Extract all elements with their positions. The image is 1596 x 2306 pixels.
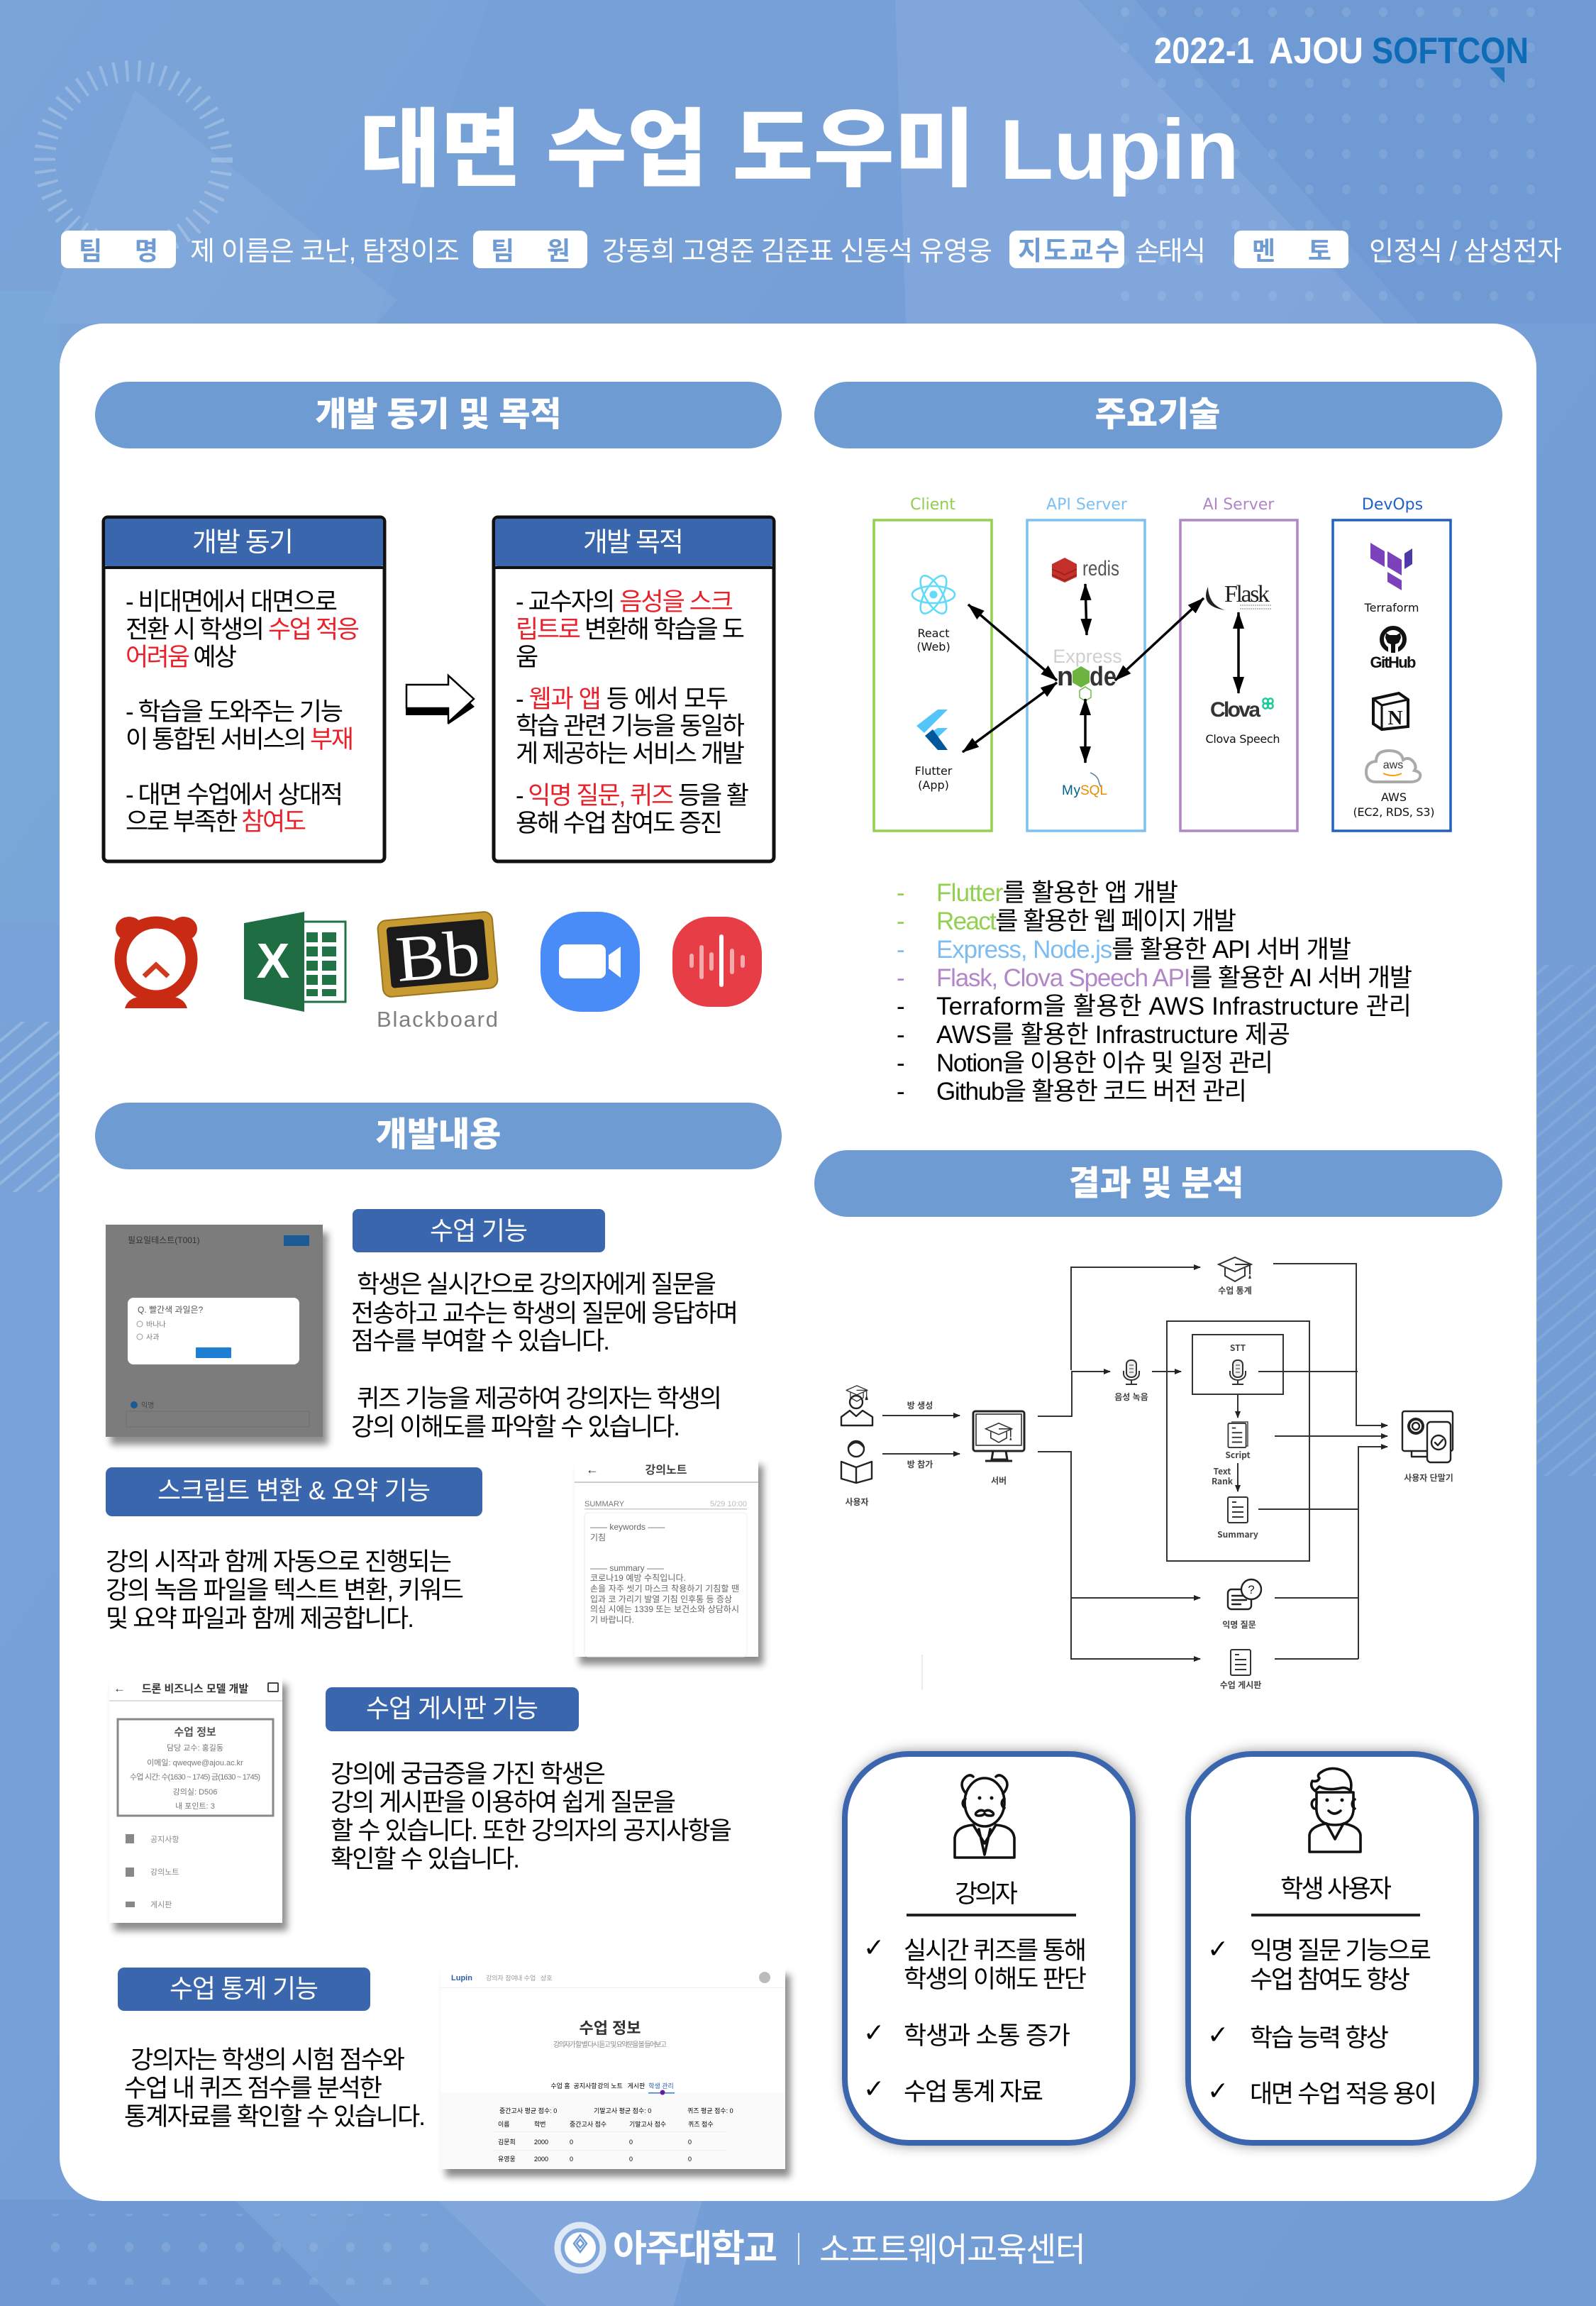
panel: 개발 동기: - 대면 수업에서 상대적 [126,781,343,809]
tech list: Express, Node.js를 활용한 API 서버 개발 [936,936,1351,964]
screenshot: class statistics: 김문희 [498,2138,516,2146]
icon: Flutter: (App) [918,778,949,792]
panel: 개발 동기: 어려움 예상 [126,644,237,671]
column: API Server [1027,496,1145,831]
pill: 수업 게시판 기능: 수업 게시판 기능 [366,1694,538,1723]
icon: Redis [1052,557,1119,583]
tech list: Notion을 이용한 이슈 및 일정 관리 [936,1049,1273,1077]
text: 게시판 기능 설명: 확인할 수 있습니다. [331,1846,520,1873]
flow labels: 사용자 [845,1496,869,1508]
professor: 손태식 [1135,237,1206,267]
pill: 수업 게시판 기능 [326,1687,579,1731]
icon: Terraform: Terraform [1364,601,1419,614]
flow labels: 방 참가 [907,1458,933,1470]
flow labels: STT [1230,1342,1246,1354]
screenshot: class board menu: 담당 교수: 홍길동 [167,1743,223,1753]
screenshot: class statistics: 퀴즈 점수 [688,2120,714,2128]
screenshot: class statistics: 퀴즈 평균 점수: 0 [687,2107,733,2114]
pill: 스크립트 변환 & 요약 기능: 스크립트 변환 & 요약 기능 [157,1476,431,1505]
tech list: Flask, Clova Speech API를 활용한 AI 서버 개발 [936,964,1412,992]
icon: Express and Node.js: n [1057,662,1073,692]
screenshot: class board menu: 강의실: D506 [173,1787,217,1797]
heading: 결과 및 분석: 결과 및 분석 [1068,1165,1244,1203]
icon: Notion [1373,693,1408,729]
panel: 개발 목적: 학습 관련 기능을 동일하 [516,712,745,740]
panel: 개발 목적: 용해 수업 참여도 증진 [516,810,723,837]
screenshot: class statistics: 0 [629,2156,633,2163]
icon: Blackboard [377,911,498,1032]
screenshot: class board menu [109,1677,282,1923]
panel: 개발 동기 [104,517,384,861]
logo: 2022-1 AJOU SOFTCON: SOFTCON [1372,31,1529,72]
footer: Ajou University Software Education Center: 소프트웨어교육센터 [819,2231,1086,2268]
icon: lecturer [955,1775,1014,1858]
screenshot: lecture note [575,1457,758,1657]
icon: Terraform [1364,543,1419,614]
icon: class statistics cap [1219,1257,1251,1281]
icon: MySQL [1062,773,1107,798]
icon: Express and Node.js [1053,646,1122,701]
icon: lecturer user [841,1386,872,1425]
arrows: connections [963,584,1238,763]
card: 학생 사용자 [1188,1754,1476,2143]
team info row [61,231,1562,268]
card: 학생 사용자: ✓ [1207,2021,1229,2050]
card: 강의자: 강의자 [955,1880,1018,1908]
icons: existing apps [116,911,762,1032]
screenshot: class statistics: 강의자 참여 [486,1974,517,1982]
flow labels: 방 생성 [907,1399,933,1411]
panel: 개발 목적: 게 제공하는 서비스 개발 [516,740,745,768]
card: 학생 사용자: 대면 수업 적응 용이 [1250,2080,1437,2108]
tech list: - [897,907,905,935]
panel: 개발 동기: 개발 동기 [192,528,294,558]
text: 통계 기능 설명 [124,2046,426,2131]
tech list: - [897,993,905,1020]
icon: voice recorder [672,917,762,1007]
screenshot: class board menu: ← [113,1682,126,1695]
screenshot: class statistics: 기말고사 평균 점수: 0 [594,2107,651,2114]
card: 강의자: ✓ [863,1933,885,1963]
flow lines [882,1264,1387,1659]
pill: 수업 통계 기능: 수업 통계 기능 [170,1974,318,2003]
tech list: - [897,964,905,992]
icon: Express and Node.js: Express [1053,646,1122,667]
screenshot: class statistics: 2000 [534,2156,548,2163]
mentor pill [1234,231,1348,268]
icon: university seal [558,2225,603,2271]
panel: 개발 목적: 개발 목적 [583,528,684,558]
tech list: - [897,1021,905,1049]
icon: Express and Node.js: de [1090,662,1116,692]
panel: 개발 동기: 으로 부족한 참여도 [126,808,306,836]
screenshot: lecture note: ← [586,1462,599,1477]
screenshot: class statistics: 2000 [534,2139,548,2146]
text: 게시판 기능 설명: 할 수 있습니다. 또한 강의자의 공지사항을 [331,1817,732,1845]
text: 수업 기능 설명: 퀴즈 기능을 제공하여 강의자는 학생의 [357,1385,722,1413]
icon: Notion: N [1388,707,1403,729]
screenshot: class statistics: 0 [688,2156,692,2163]
logo: 2022-1 AJOU SOFTCON [1154,31,1529,83]
tech list: React를 활용한 웹 페이지 개발 [936,907,1236,935]
screenshot: class statistics: 수업 홈 [550,2082,570,2090]
column: AI Server: AI Server [1203,496,1275,514]
heading: 개발 동기 및 목적: 개발 동기 및 목적 [315,396,562,434]
icon: GitHub: GitHub [1370,653,1416,671]
text: 통계 기능 설명: 강의자는 학생의 시험 점수와 [131,2046,405,2074]
card: 학생 사용자: 수업 참여도 향상 [1250,1966,1410,1994]
arrow: 동기 to 목적 [406,675,475,724]
screenshot: class board menu: 공지사항 [150,1835,179,1844]
icon: question: ? [1248,1583,1255,1596]
card: 강의자: 학생의 이해도 판단 [904,1965,1087,1993]
text: 게시판 기능 설명: 강의에 궁금증을 가진 학생은 [331,1760,606,1788]
screenshot: class statistics: 강의 노트 [597,2082,623,2090]
icon: Clova: Clova [1210,698,1260,722]
screenshot: class statistics: 수업 정보 [579,2019,641,2037]
text: 수업 기능 설명: 점수를 부여할 수 있습니다. [351,1328,610,1355]
screenshot: lecture note: —— summary —— [590,1563,664,1573]
flow labels: 익명 질문 [1222,1618,1256,1631]
tech architecture diagram [874,496,1451,831]
flow labels [845,1284,1453,1691]
screenshot: quiz screen: 익명 [141,1401,154,1410]
panel: 개발 목적: 립트로 변환해 학습을 도 [516,616,745,644]
screenshot: class statistics: 강의자가 할 별 다시 듣고 및 요약문을 볼 들어보고 [553,2041,667,2049]
panel: 개발 목적: - 웹과 앱 등 에서 모두 [516,685,728,713]
screenshot: quiz screen: 필요일테스트(T001) [128,1235,200,1245]
heading: 주요기술: 주요기술 [1095,396,1220,434]
icon: alarm [116,917,197,1008]
flow labels: 서버 [991,1474,1007,1486]
tech list: Terraform을 활용한 AWS Infrastructure 관리 [936,993,1412,1020]
icon: Clova [1206,698,1280,746]
icon: Zoom [541,912,640,1012]
panel: 개발 동기: - 학습을 도와주는 기능 [126,698,343,726]
panel: 개발 동기: 전환 시 학생의 수업 적응 [126,616,360,644]
screenshot: class board menu: 수업 시간: 수(1630 ~ 1745) 금(1630 ~ 1745) [130,1772,260,1782]
panel: 개발 동기: 이 통합된 서비스의 부재 [126,726,354,754]
mentor: 인정식 / 삼성전자 [1369,237,1562,267]
text: 수업 기능 설명: 강의 이해도를 파악할 수 있습니다. [351,1413,680,1441]
screenshot: quiz screen: Q. 빨간색 과일은? [138,1305,204,1315]
screenshot: lecture note: —— keywords —— [590,1522,665,1532]
icon: AWS: aws [1383,759,1403,771]
screenshot: class board menu: 드론 비즈니스 모델 개발 [142,1683,248,1695]
text: 통계 기능 설명: 통계자료를 확인할 수 있습니다. [124,2103,426,2131]
screenshot: class statistics: 0 [688,2139,692,2146]
card: 학생 사용자: 학생 사용자 [1280,1875,1392,1903]
panel: 개발 목적: - 교수자의 음성을 스크 [516,588,733,616]
logo: 2022-1 AJOU SOFTCON: 2022-1 [1154,31,1254,72]
icon: React [912,572,955,653]
icon: AWS: (EC2, RDS, S3) [1353,805,1434,819]
icon: Flask: Flask [1224,581,1270,607]
panel: 개발 목적: 움 [516,644,538,671]
pill: 스크립트 변환 & 요약 기능 [106,1467,482,1516]
screenshot: class statistics: 상호 [541,1975,553,1982]
text: 스크립트 기능 설명 [106,1548,464,1633]
screenshot: class board menu: 수업 정보 [174,1726,216,1738]
screenshot: class statistics: 공지사항 [573,2082,597,2090]
icon: student user [841,1441,872,1483]
icon: summary [1228,1497,1248,1523]
screenshot: quiz screen [106,1225,323,1437]
screenshot: class statistics: 내 수업 [516,1975,536,1982]
screenshot: class statistics: 0 [570,2156,573,2163]
column: API Server: API Server [1046,496,1128,514]
screenshot: lecture note: 5/29 10:00 [710,1500,747,1508]
screenshot: lecture note: 기 바랍니다. [590,1615,634,1625]
text: 수업 기능 설명 [351,1271,738,1441]
text: 스크립트 기능 설명: 및 요약 파일과 함께 제공합니다. [106,1605,414,1633]
screenshot: class statistics: 학생 관리 [648,2082,674,2090]
screenshot: class statistics: Lupin [451,1974,472,1982]
text: 수업 기능 설명: 전송하고 교수는 학생의 질문에 응답하며 [351,1300,738,1328]
icon: question [1228,1579,1261,1609]
column: DevOps [1333,496,1451,831]
pill: 수업 기능 [353,1209,605,1252]
icon: class board [1231,1650,1251,1675]
icon: server monitor [973,1411,1024,1461]
mentor pill: 멘 토 [1252,236,1331,265]
screenshot: class statistics: 게시판 [628,2082,645,2090]
text: 스크립트 기능 설명: 강의 녹음 파일을 텍스트 변환, 키워드 [106,1577,464,1604]
tech list: - [897,1078,905,1105]
professor pill: 지도교수 [1018,236,1119,265]
card: 강의자 [845,1754,1133,2143]
tech list: - [897,879,905,907]
title: 대면 수업 도우미 Lupin [360,102,1239,197]
card: 강의자: ✓ [863,2019,885,2048]
flow labels: 수업 통계 [1218,1284,1252,1296]
tech list: - [897,1049,905,1077]
flow labels: Script [1225,1449,1251,1461]
icon: user device [1402,1411,1453,1462]
tech list: Flutter를 활용한 앱 개발 [936,879,1178,907]
icon: student [1309,1768,1361,1852]
icon: AWS [1353,751,1434,819]
icon: GitHub [1370,628,1416,671]
icon: STT microphone [1230,1360,1246,1384]
icon: MySQL: My [1062,783,1081,798]
column: DevOps: DevOps [1362,496,1423,514]
card: 학생 사용자: 학습 능력 향상 [1250,2024,1389,2052]
text: 게시판 기능 설명: 강의 게시판을 이용하여 쉽게 질문을 [331,1789,676,1816]
screenshot: class board menu: 게시판 [150,1900,172,1909]
flow labels: 수업 게시판 [1220,1679,1261,1691]
tech list: AWS를 활용한 Infrastructure 제공 [936,1021,1290,1049]
icon: microphone [1124,1360,1139,1384]
screenshot: quiz screen: 사과 [146,1333,159,1342]
flow diagram: results [841,1257,1453,1691]
screenshot: lecture note: 강의노트 [645,1464,687,1477]
team members: 강동희 고영준 김준표 신동석 유영웅 [602,237,992,267]
card: 강의자: 수업 통계 자료 [904,2078,1043,2106]
screenshot: class statistics: 유영웅 [498,2156,516,2163]
screenshot: quiz screen: 바나나 [146,1320,166,1329]
panel: 개발 목적: - 익명 질문, 퀴즈 등을 활 [516,782,749,810]
tech list: - [897,936,905,964]
card: 학생 사용자: ✓ [1207,1935,1229,1964]
text: 스크립트 기능 설명: 강의 시작과 함께 자동으로 진행되는 [106,1548,452,1576]
screenshot: lecture note: 코로나19 예방 수칙입니다. [590,1573,686,1583]
column: AI Server [1180,496,1297,831]
panel: 개발 동기: - 비대면에서 대면으로 [126,588,338,616]
icon: AWS: AWS [1381,790,1407,804]
icon: React: (Web) [916,640,951,653]
heading: 개발내용 [95,1103,782,1169]
icon: Redis: redis [1082,557,1119,580]
screenshot: class statistics: 0 [629,2139,633,2146]
card: 강의자: ✓ [863,2075,885,2104]
screenshot: class board menu: 이메일: qweqwe@ajou.ac.kr [147,1758,243,1767]
icon: Excel [244,912,345,1012]
screenshot: class statistics: 중간고사 평균 점수: 0 [499,2107,557,2114]
screenshot: lecture note: 입과 코 가리기 발열 기침 인후통 등 증상 [590,1594,732,1604]
STT process box [1167,1321,1309,1561]
icon: Blackboard: Bb [393,916,482,995]
text: 통계 기능 설명: 수업 내 퀴즈 점수를 분석한 [124,2075,382,2102]
icon: Excel: X [257,933,290,988]
pill: 수업 기능: 수업 기능 [430,1216,528,1245]
icon: Flask [1206,581,1271,610]
icon: Clova: Clova Speech [1206,732,1280,746]
screenshot: class board menu: 강의노트 [150,1868,179,1877]
icon: MySQL: SQL [1080,783,1107,798]
screenshot: class statistics [440,1967,785,2169]
team members pill [473,231,587,268]
logo: 2022-1 AJOU SOFTCON: AJOU [1269,31,1363,72]
flow labels: 음성 녹음 [1114,1391,1148,1403]
text: 수업 기능 설명: 학생은 실시간으로 강의자에게 질문을 [357,1271,716,1298]
screenshot: lecture note: 기침 [590,1533,606,1543]
card: 강의자: 학생과 소통 증가 [904,2022,1070,2050]
column: Client: Client [910,496,955,514]
screenshot: class statistics: 기말고사 점수 [629,2120,666,2128]
panel: 개발 목적 [494,517,774,861]
icon: script [1228,1422,1248,1447]
card: 학생 사용자: 익명 질문 기능으로 [1250,1937,1431,1965]
text: 게시판 기능 설명 [331,1760,732,1873]
screenshot: class statistics: 중간고사 점수 [570,2120,606,2128]
team name: 제 이름은 코난, 탐정이조 [190,237,460,267]
tech list [897,879,1412,1105]
heading: 결과 및 분석 [814,1150,1502,1217]
team name pill: 팀 명 [79,236,158,265]
card: 강의자: 실시간 퀴즈를 통해 [904,1937,1087,1965]
heading: 개발내용: 개발내용 [376,1116,501,1154]
flow labels: Rank [1212,1475,1234,1487]
screenshot: lecture note: SUMMARY [584,1500,625,1508]
flow labels: 사용자 단말기 [1404,1472,1453,1484]
screenshot: class statistics: 이름 [498,2121,510,2128]
flow labels: Summary [1217,1528,1258,1540]
icon: Blackboard: Blackboard [377,1007,498,1032]
heading: 개발 동기 및 목적 [95,382,782,448]
card: 학생 사용자: ✓ [1207,2077,1229,2106]
team name pill [61,231,176,268]
screenshot: lecture note: 의심 시에는 1339 또는 보건소와 상담하시 [590,1604,739,1614]
flow labels: Text [1214,1465,1231,1477]
column: Client [874,496,992,831]
heading: 주요기술 [814,382,1502,448]
footer: Ajou University Software Education Center: 아주대학교 [613,2229,777,2270]
icon: Flutter: Flutter [915,764,953,778]
professor pill [1009,231,1124,268]
screenshot: class statistics: 0 [570,2139,573,2146]
screenshot: class board menu: 내 포인트: 3 [175,1802,215,1811]
icon: Flutter [915,710,953,792]
tech list: Github을 활용한 코드 버전 관리 [936,1078,1247,1105]
screenshot: lecture note: 손을 자주 씻기 마스크 착용하기 기침할 땐 [590,1584,739,1594]
screenshot: class statistics: 학번 [534,2121,546,2128]
main white panel [60,324,1536,2201]
footer: Ajou University Software Education Center [558,2225,1086,2271]
team members pill: 팀 원 [491,236,570,265]
icon: React: React [917,627,950,640]
pill: 수업 통계 기능 [118,1968,370,2011]
